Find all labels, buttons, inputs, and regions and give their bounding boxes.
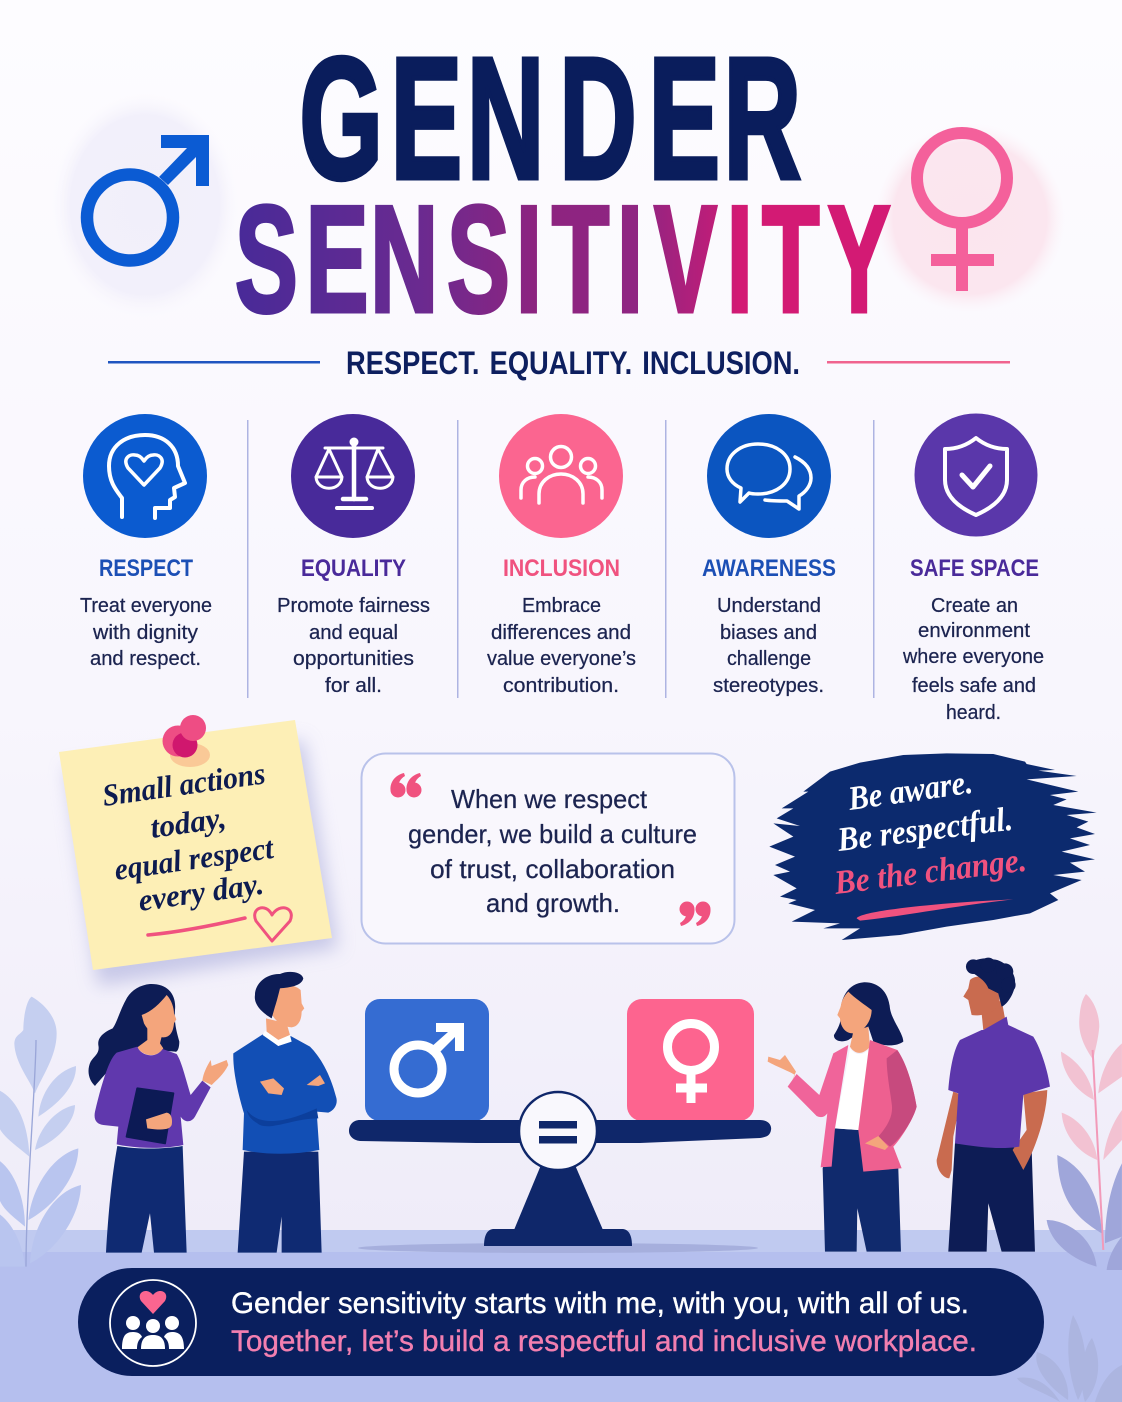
- sleeve: [878, 1050, 917, 1147]
- callout text: [832, 764, 1029, 902]
- description: with dignity: [92, 622, 198, 644]
- face: [963, 977, 1000, 1015]
- face: [142, 995, 176, 1037]
- title: [235, 22, 891, 344]
- plant: left: [0, 997, 81, 1267]
- description: for all.: [325, 675, 382, 697]
- base: [484, 1229, 632, 1246]
- raised hand: [768, 1055, 796, 1082]
- banner text: Gender sensitivity starts with me, with you, with all of us.: [231, 1287, 969, 1320]
- note text: every day.: [136, 866, 266, 918]
- icon: push pin: [162, 715, 210, 767]
- person: man in blue: [233, 972, 337, 1253]
- face: [270, 985, 304, 1027]
- hair: [89, 984, 179, 1086]
- callout text: Be the change.: [832, 842, 1029, 902]
- pocket hand: [865, 1136, 888, 1150]
- description: Treat everyone: [80, 595, 212, 617]
- shirt: [948, 1017, 1050, 1148]
- description: opportunities: [293, 648, 414, 670]
- plant: bottom right corner: [1017, 1315, 1122, 1402]
- note text: equal respect: [112, 830, 277, 887]
- note text: Small actions: [100, 755, 267, 813]
- sticky note: [59, 715, 338, 986]
- blazer: [788, 1045, 848, 1167]
- description: where everyone: [902, 646, 1044, 668]
- underline and heart: [148, 908, 291, 941]
- heading: AWARENESS: [702, 555, 836, 582]
- tablet: [127, 1088, 173, 1143]
- hair: [255, 972, 303, 1018]
- quote text: and growth.: [486, 888, 620, 918]
- description: biases and: [720, 622, 817, 644]
- arm shade: [247, 1108, 318, 1126]
- panel: inclusion: [487, 414, 636, 697]
- pants: [238, 1152, 322, 1253]
- beam: [349, 1120, 771, 1143]
- description: Promote fairness: [277, 595, 430, 617]
- description: heard.: [946, 702, 1001, 724]
- hair: [966, 958, 1016, 1007]
- pants: [948, 1143, 1035, 1252]
- shadow: [358, 1243, 758, 1253]
- description: Embrace: [522, 595, 601, 617]
- heading: EQUALITY: [301, 555, 406, 582]
- balance scale: [349, 999, 771, 1253]
- sweater: [233, 1034, 337, 1154]
- quote text: When we respect: [451, 784, 648, 814]
- banner text: Together, let’s build a respectful and inclusive workplace.: [231, 1325, 977, 1358]
- banner text: [231, 1287, 977, 1358]
- description: and respect.: [90, 648, 201, 670]
- quote box: [362, 754, 734, 944]
- female block: [627, 999, 754, 1121]
- pink brush underline: [857, 899, 1013, 921]
- icon: scales: [291, 414, 415, 538]
- description: value everyone’s: [487, 648, 636, 670]
- person: woman in purple: [89, 984, 228, 1253]
- equals sign: [519, 1092, 597, 1170]
- subtitle: RESPECT. EQUALITY. INCLUSION.: [346, 345, 800, 381]
- pants: [823, 1128, 901, 1252]
- panel: equality: [277, 414, 430, 697]
- description: [80, 595, 212, 670]
- footer banner: [78, 1268, 1044, 1376]
- description: challenge: [727, 648, 811, 670]
- icon: male symbol: [52, 93, 238, 317]
- plant: right: [1047, 994, 1122, 1270]
- sweater: [95, 1047, 211, 1148]
- icon: speech bubbles: [707, 414, 831, 538]
- quote text: [408, 784, 697, 918]
- quote text: of trust, collaboration: [430, 854, 675, 884]
- fulcrum: [514, 1165, 603, 1230]
- panel: safe space: [902, 414, 1044, 724]
- neck: [850, 1027, 870, 1053]
- description: [902, 595, 1044, 724]
- shirt: [835, 1048, 869, 1130]
- arms: [937, 1090, 1047, 1178]
- icon: female symbol: [874, 123, 1066, 313]
- holding hand: [146, 1113, 172, 1129]
- raised hand: [202, 1060, 228, 1085]
- hands: [260, 1075, 325, 1095]
- icon: team with heart: [110, 1280, 196, 1366]
- panel: respect: [80, 414, 212, 670]
- neck: [137, 1027, 163, 1055]
- person: man in purple shirt: [937, 958, 1050, 1252]
- description: differences and: [491, 622, 631, 644]
- icon: shield with check: [914, 414, 1038, 536]
- note text: [100, 755, 277, 918]
- hair: [834, 982, 903, 1045]
- ground: [0, 1230, 1122, 1402]
- panel: awareness: [702, 414, 836, 697]
- person: woman in pink: [768, 982, 917, 1252]
- description: stereotypes.: [713, 675, 824, 697]
- description: and equal: [309, 622, 398, 644]
- heading: SAFE SPACE: [910, 555, 1039, 582]
- male block: [365, 999, 489, 1121]
- title: GENDER: [299, 22, 801, 215]
- icon: people group: [499, 414, 623, 538]
- callout text: Be aware.: [845, 764, 975, 818]
- brush callout: [769, 753, 1097, 940]
- quote text: gender, we build a culture: [408, 819, 697, 849]
- heading: RESPECT: [99, 555, 193, 582]
- neck: [982, 1000, 1005, 1030]
- heading: INCLUSION: [503, 555, 620, 582]
- callout text: Be respectful.: [835, 801, 1015, 859]
- description: [487, 595, 636, 697]
- dividers: [247, 420, 874, 698]
- neck: [266, 1018, 290, 1040]
- face: [837, 992, 872, 1033]
- description: Understand: [717, 595, 821, 617]
- description: Create an: [931, 595, 1018, 617]
- pants: [106, 1146, 187, 1253]
- title: SENSITIVITY: [235, 174, 891, 344]
- description: environment: [918, 620, 1030, 642]
- description: [713, 595, 824, 697]
- icon: closing quote mark: [680, 902, 711, 926]
- description: [277, 595, 430, 697]
- collar: [263, 1031, 292, 1046]
- description: contribution.: [503, 675, 619, 697]
- note text: today,: [148, 800, 228, 845]
- icon: opening quote mark: [390, 773, 422, 798]
- description: feels safe and: [912, 675, 1036, 697]
- icon: head with heart: [83, 414, 207, 538]
